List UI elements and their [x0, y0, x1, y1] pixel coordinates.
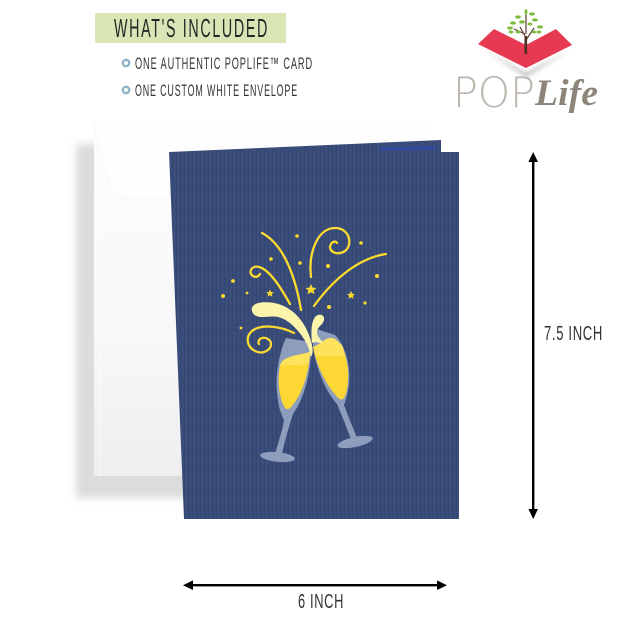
logo chevron shadow	[484, 50, 570, 77]
heading: what's included	[95, 13, 286, 43]
height arrow	[528, 152, 538, 519]
right glass bowl and stem	[313, 328, 358, 442]
firework streak centre	[262, 233, 301, 310]
envelope side seam	[99, 140, 101, 476]
bullet: card	[123, 55, 313, 73]
right glass foam	[313, 338, 344, 356]
logo tree	[507, 9, 543, 54]
width arrow	[183, 580, 447, 590]
right glass champagne	[313, 338, 348, 399]
left glass foam	[280, 352, 310, 366]
firework spiral lower	[248, 327, 294, 352]
left glass bowl and stem	[275, 338, 311, 454]
logo: PopLife	[453, 9, 598, 117]
firework spiral left	[251, 267, 290, 304]
logo wordmark Life: Life	[534, 73, 598, 114]
champagne glass right	[313, 328, 374, 451]
champagne splash right	[311, 315, 324, 343]
card shape	[169, 140, 459, 519]
envelope body	[94, 122, 424, 476]
dimension: width	[183, 580, 447, 613]
greeting card	[169, 140, 459, 519]
envelope shadow	[76, 144, 376, 498]
width label: 6 INCH	[298, 591, 344, 613]
right glass foot	[336, 433, 374, 451]
heading: what's included: WHAT'S INCLUDED	[114, 13, 269, 43]
list of included items	[123, 55, 313, 100]
envelope flap	[94, 122, 424, 197]
firework streak right	[314, 254, 386, 306]
logo wordmark POP: POP	[453, 68, 535, 117]
card inner blue edge	[380, 148, 436, 149]
left glass champagne	[279, 352, 310, 409]
champagne glass left	[260, 338, 311, 464]
left glass foot	[260, 450, 295, 464]
envelope	[76, 122, 424, 498]
logo red open book	[478, 29, 572, 68]
sparkle dots and stars	[221, 234, 379, 329]
bullet: envelope: ONE CUSTOM WHITE ENVELOPE	[135, 82, 298, 100]
fireworks	[248, 228, 386, 352]
firework spiral top	[310, 228, 349, 277]
dimension: height	[528, 152, 603, 519]
champagne splash left	[252, 302, 313, 357]
bullet: card: ONE AUTHENTIC POPLIFE™ CARD	[135, 55, 313, 73]
bullet: envelope	[123, 82, 298, 100]
